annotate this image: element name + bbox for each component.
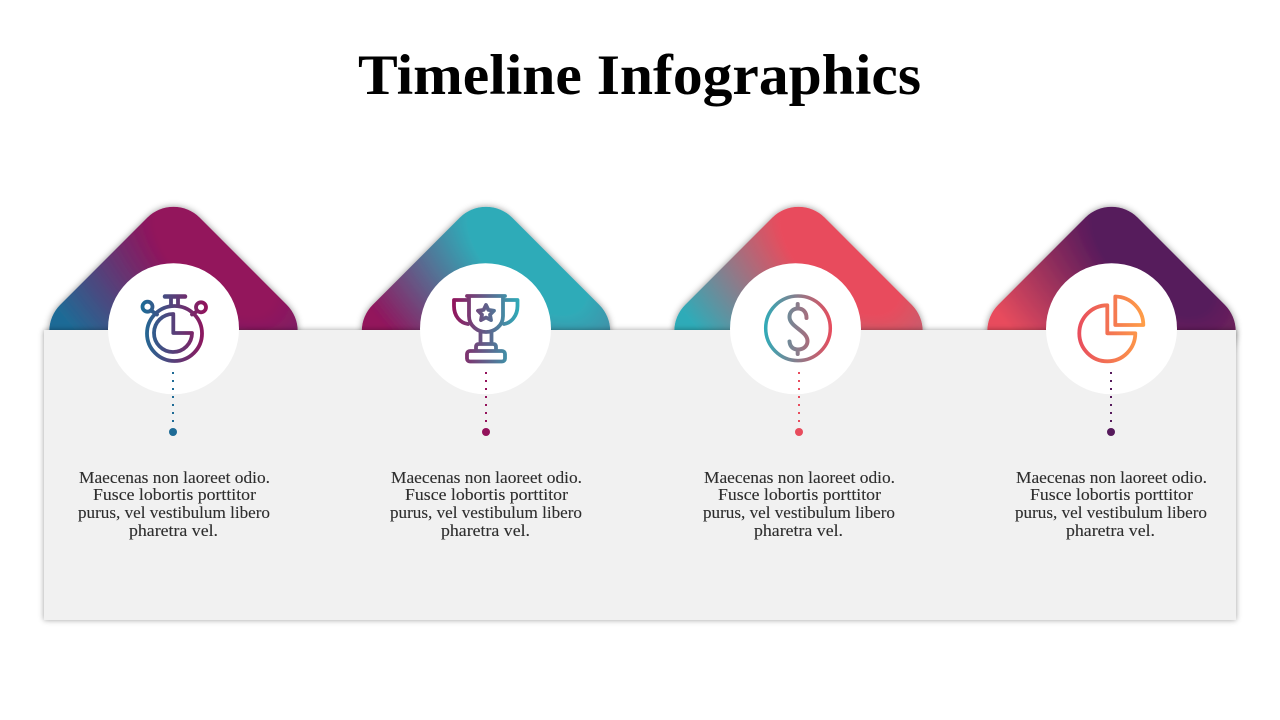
dot 3	[795, 428, 803, 436]
text block 1: pharetra vel.	[129, 521, 218, 540]
text block 3: purus, vel vestibulum libero	[703, 503, 895, 522]
text block 1: Fusce lobortis porttitor	[93, 485, 256, 504]
text block 3: Fusce lobortis porttitor	[718, 485, 881, 504]
icon circle 3	[730, 263, 861, 394]
text block 3: Maecenas non laoreet odio.	[704, 468, 895, 487]
text block 2: Maecenas non laoreet odio.	[391, 468, 582, 487]
text block 4: Fusce lobortis porttitor	[1030, 485, 1193, 504]
text block 4	[1015, 468, 1207, 540]
diamond tab 1	[49, 207, 298, 455]
text block 4: purus, vel vestibulum libero	[1015, 503, 1207, 522]
icon: pie chart	[1079, 296, 1143, 361]
icon: stopwatch	[142, 296, 206, 361]
panel: grey background	[44, 330, 1236, 620]
text block 2: Fusce lobortis porttitor	[405, 485, 568, 504]
dotted connector 3	[798, 372, 800, 424]
dotted connector 1	[172, 372, 174, 424]
dotted connector 2	[485, 372, 487, 424]
step 3: dollar	[703, 263, 895, 540]
diamond tab 3	[674, 207, 923, 455]
text block 2: purus, vel vestibulum libero	[390, 503, 582, 522]
text block 3	[703, 468, 895, 540]
text block 2	[390, 468, 582, 540]
text block 3: pharetra vel.	[754, 521, 843, 540]
title: Timeline Infographics	[358, 44, 921, 107]
diamond tab 2	[362, 207, 610, 455]
step 1: stopwatch	[78, 263, 270, 540]
dotted connector 4	[1110, 372, 1112, 424]
step 2: trophy	[390, 263, 582, 540]
text block 1: Maecenas non laoreet odio.	[79, 468, 270, 487]
icon: trophy	[454, 296, 518, 362]
text block 1: purus, vel vestibulum libero	[78, 503, 270, 522]
dot 4	[1107, 428, 1115, 436]
step 4: pie chart	[1015, 263, 1207, 540]
dot 1	[169, 428, 177, 436]
text block 1	[78, 468, 270, 540]
diamond tab 4	[987, 207, 1236, 455]
icon circle 1	[108, 263, 239, 394]
text block 4: Maecenas non laoreet odio.	[1016, 468, 1207, 487]
icon circle 4	[1046, 263, 1177, 394]
dot 2	[482, 428, 490, 436]
icon: dollar coin	[766, 296, 830, 361]
text block 2: pharetra vel.	[441, 521, 530, 540]
text block 4: pharetra vel.	[1066, 521, 1155, 540]
icon circle 2	[420, 263, 551, 394]
